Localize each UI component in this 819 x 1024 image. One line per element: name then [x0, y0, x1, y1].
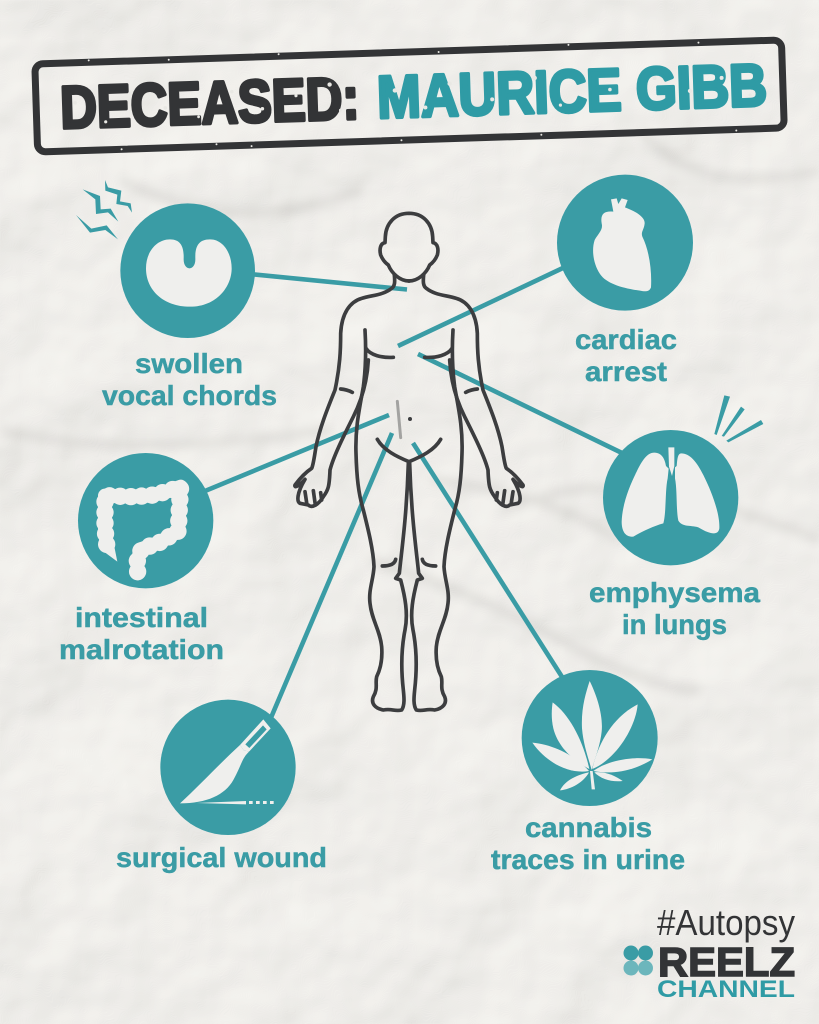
stamp border [35, 40, 784, 152]
title: deceased: DECEASED: [59, 65, 360, 141]
title: name: MAURICE GIBB [376, 51, 768, 131]
label: intestinal malrotation [59, 602, 224, 665]
label: intestinal malrotation: intestinal [75, 602, 208, 633]
label: cannabis traces in urine [491, 812, 685, 875]
left half of body [295, 213, 409, 710]
logo: Reelz Channel [624, 939, 795, 1003]
label: cardiac arrest: arrest [585, 356, 667, 387]
label: surgical wound: surgical wound [116, 842, 327, 873]
icon: heart [557, 175, 693, 311]
label: cannabis traces in urine: cannabis [525, 812, 652, 843]
panel: cannabis traces in urine [491, 670, 685, 875]
label: cardiac arrest: cardiac [575, 324, 677, 355]
icon: lungs [603, 395, 763, 565]
panel: surgical wound [116, 700, 327, 873]
body outline [295, 213, 523, 710]
panel: intestinal malrotation [59, 453, 224, 665]
panel: cardiac arrest [557, 175, 693, 387]
navel [408, 417, 412, 421]
label: swollen vocal chords: swollen [135, 348, 243, 379]
surgical scar [397, 401, 401, 438]
logo dots [624, 946, 653, 976]
hashtag: #Autopsy [657, 902, 795, 943]
logo subtitle: CHANNEL [657, 976, 795, 1003]
label: emphysema in lungs: in lungs [622, 609, 727, 640]
label: swollen vocal chords [102, 348, 277, 411]
title stamp [35, 37, 784, 154]
label: swollen vocal chords: vocal chords [102, 380, 277, 411]
icon: cannabis leaf [522, 670, 658, 806]
stamp distress speckles [72, 38, 753, 153]
icon: scalpel [160, 700, 296, 835]
label: emphysema in lungs [589, 577, 760, 640]
logo wordmark: REELZ [658, 939, 795, 985]
label: emphysema in lungs: emphysema [589, 577, 760, 608]
panel: emphysema in lungs [589, 395, 763, 640]
label: intestinal malrotation: malrotation [59, 634, 224, 665]
label: cardiac arrest [575, 324, 677, 387]
panel: swollen vocal chords [76, 180, 277, 411]
right half of body [409, 213, 523, 710]
connector lines [205, 267, 622, 720]
icon: vocal chords [76, 180, 255, 338]
icon: intestine [78, 453, 213, 588]
label: cannabis traces in urine: traces in urine [491, 844, 685, 875]
